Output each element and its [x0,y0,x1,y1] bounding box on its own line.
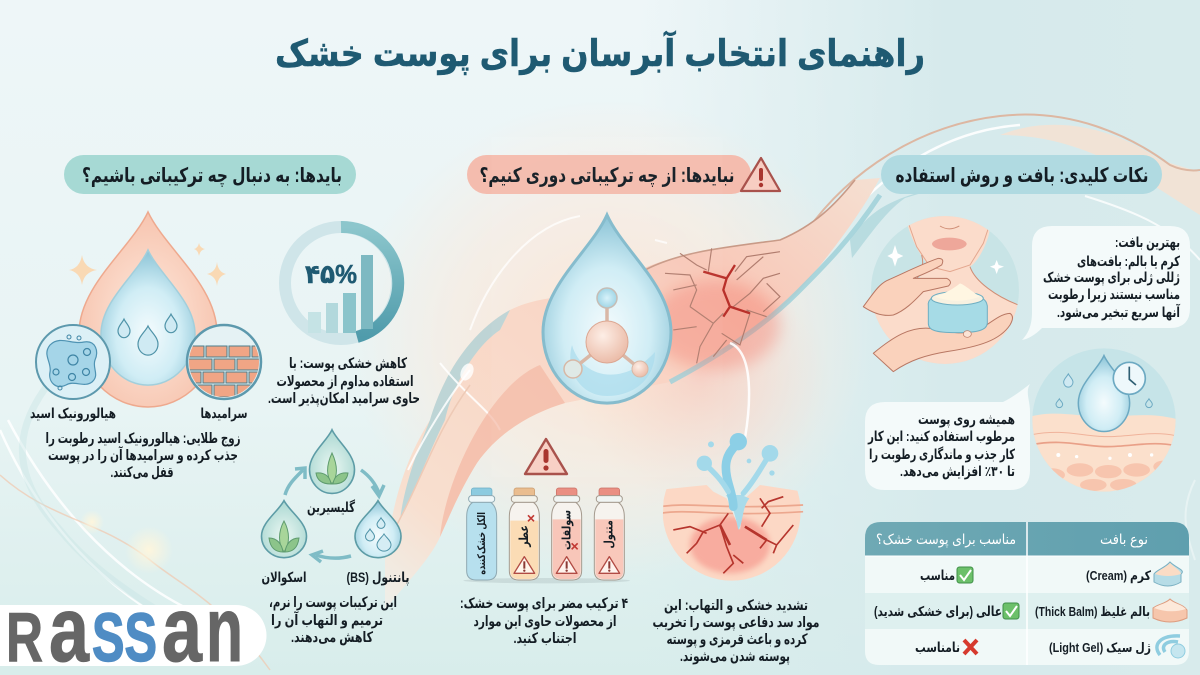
label: squalane: اسکوالان [262,569,306,586]
label: panthenol: پانتنول (BS) [346,569,410,586]
panel: key tips [860,155,1190,665]
table: texture suitability [865,522,1189,665]
icon: warning triangle heading [741,158,780,191]
text: golden pair: زوج طلایی: هیالورونیک اسید رطوبت را [46,431,240,447]
bottles: harmful ingredients [463,488,630,583]
label: glycerin: گلیسیرین [307,499,356,516]
chart: 45% donut with bars [285,227,398,339]
logo: Rassan: SS [92,599,157,675]
heading pill: dos: بایدها: به دنبال چه ترکیباتی باشیم؟ [82,165,342,188]
bottle: menthol: متنول [602,520,617,548]
row: light gel: نامناسب [915,640,960,655]
text: dryness reduction [268,356,420,407]
text: dryness and inflammation: پوسته شدن می‌شوند. [680,649,790,665]
row: cream: مناسب [920,568,955,583]
text: trio description: این ترکیبات پوست را نرم، [269,595,397,611]
row: thick balm: عالی (برای خشکی شدید) [874,604,1002,619]
label: ceramides: سرامیدها [200,405,248,422]
text: trio description [269,595,397,646]
bottle: fragrance [509,488,539,580]
callout: best texture [1022,226,1190,340]
illustration: golden pair drop [69,212,226,407]
icon: squalane drop [262,501,306,558]
label: hyaluronic acid: هیالورونیک اسید [30,405,116,422]
table header: مناسب برای پوست خشک؟ [876,531,1016,548]
text: dryness reduction: حاوی سرامید امکان‌پذیر است. [268,391,420,407]
bottle: sulfate: سولفات [559,510,574,550]
text: golden pair [46,431,240,481]
text: golden pair: جذب کرده و سرامیدها آن را در پوست [48,446,238,464]
text: dryness reduction: استفاده مداوم از محصولات [276,374,414,390]
row: cream [920,562,1182,586]
text: four harmful ingredients: از محصولات حاوی این موارد [474,614,616,630]
icon: hyaluronic acid [36,325,110,399]
illustration: applying cream [862,216,1019,372]
icon: warning triangle bottles [525,439,567,474]
bottle: sulfate [552,488,582,580]
bottle: menthol [594,488,624,580]
heading pill: tips [881,155,1162,194]
text: four harmful ingredients: اجتناب کنید. [514,631,576,647]
row: light gel: ژل سیک (Light Gel) [1049,640,1151,655]
heading pill: dos [64,155,356,194]
arrows: cycle [285,468,384,562]
text: trio description: ترمیم و التهاب آن را [271,611,383,629]
text: trio description: کاهش می‌دهند. [291,630,373,646]
panel: dos [30,155,420,646]
text: dryness and inflammation [652,598,820,665]
bottle: fragrance: عطر [517,525,531,548]
illustration: cracked skin with splash [660,433,803,581]
text: golden pair: قفل می‌کنند. [110,465,174,481]
chart: 45% donut with bars: ۴۵% [305,259,357,289]
text: dryness reduction: کاهش خشکی پوست: با [289,356,407,372]
row: light gel [915,636,1185,658]
panel: don'ts [460,155,820,665]
callout: damp skin [865,384,1030,490]
callout: damp skin: مرطوب استفاده کنید: این کار [867,428,1015,445]
table header [876,531,1148,548]
callout: damp skin: همیشه روی پوست [918,411,1015,428]
skin ribbon with cracks [382,178,880,610]
bottle: drying alcohol [467,488,497,580]
table header: نوع بافت [1100,531,1148,548]
callout: damp skin: تا ۳۰٪ افزایش می‌دهد. [900,463,1015,480]
row: thick balm [874,599,1187,622]
row: cream: کرم (Cream) [1086,568,1151,584]
callout: damp skin: کار جذب و ماندگاری رطوبت را [869,446,1016,463]
heading pill: don'ts: نبایدها: از چه ترکیباتی دوری کنیم؟ [480,165,734,188]
logo: Rassan [0,579,266,675]
illustration: drop on damp skin with clock [1030,348,1180,497]
bottle: drying alcohol: الکل خشک‌کننده [476,512,488,575]
text: dryness and inflammation: تشدید خشکی و التهاب: این [664,598,808,614]
heading pill: don'ts [467,155,751,194]
title: راهنمای انتخاب آبرسان برای پوست خشک [275,30,925,75]
text: dryness and inflammation: کرده و باعث قرمزی و پوسته [666,632,808,648]
icon: ceramide bricks [187,325,264,399]
text: four harmful ingredients [460,596,628,647]
icon: glycerin drop [310,430,354,493]
icon: panthenol drop [355,501,401,558]
logo: Rassan: R [6,598,43,675]
diagram: humectant trio cycle [262,430,410,586]
row: thick balm: بالم غلیظ (Thick Balm) [1035,604,1150,619]
text: dryness and inflammation: مواد سد دفاعی پوست را تخریب [652,615,820,631]
illustration: water drop with molecule [535,201,679,413]
text: four harmful ingredients: ۴ ترکیب مضر برای پوست خشک: [460,596,628,612]
